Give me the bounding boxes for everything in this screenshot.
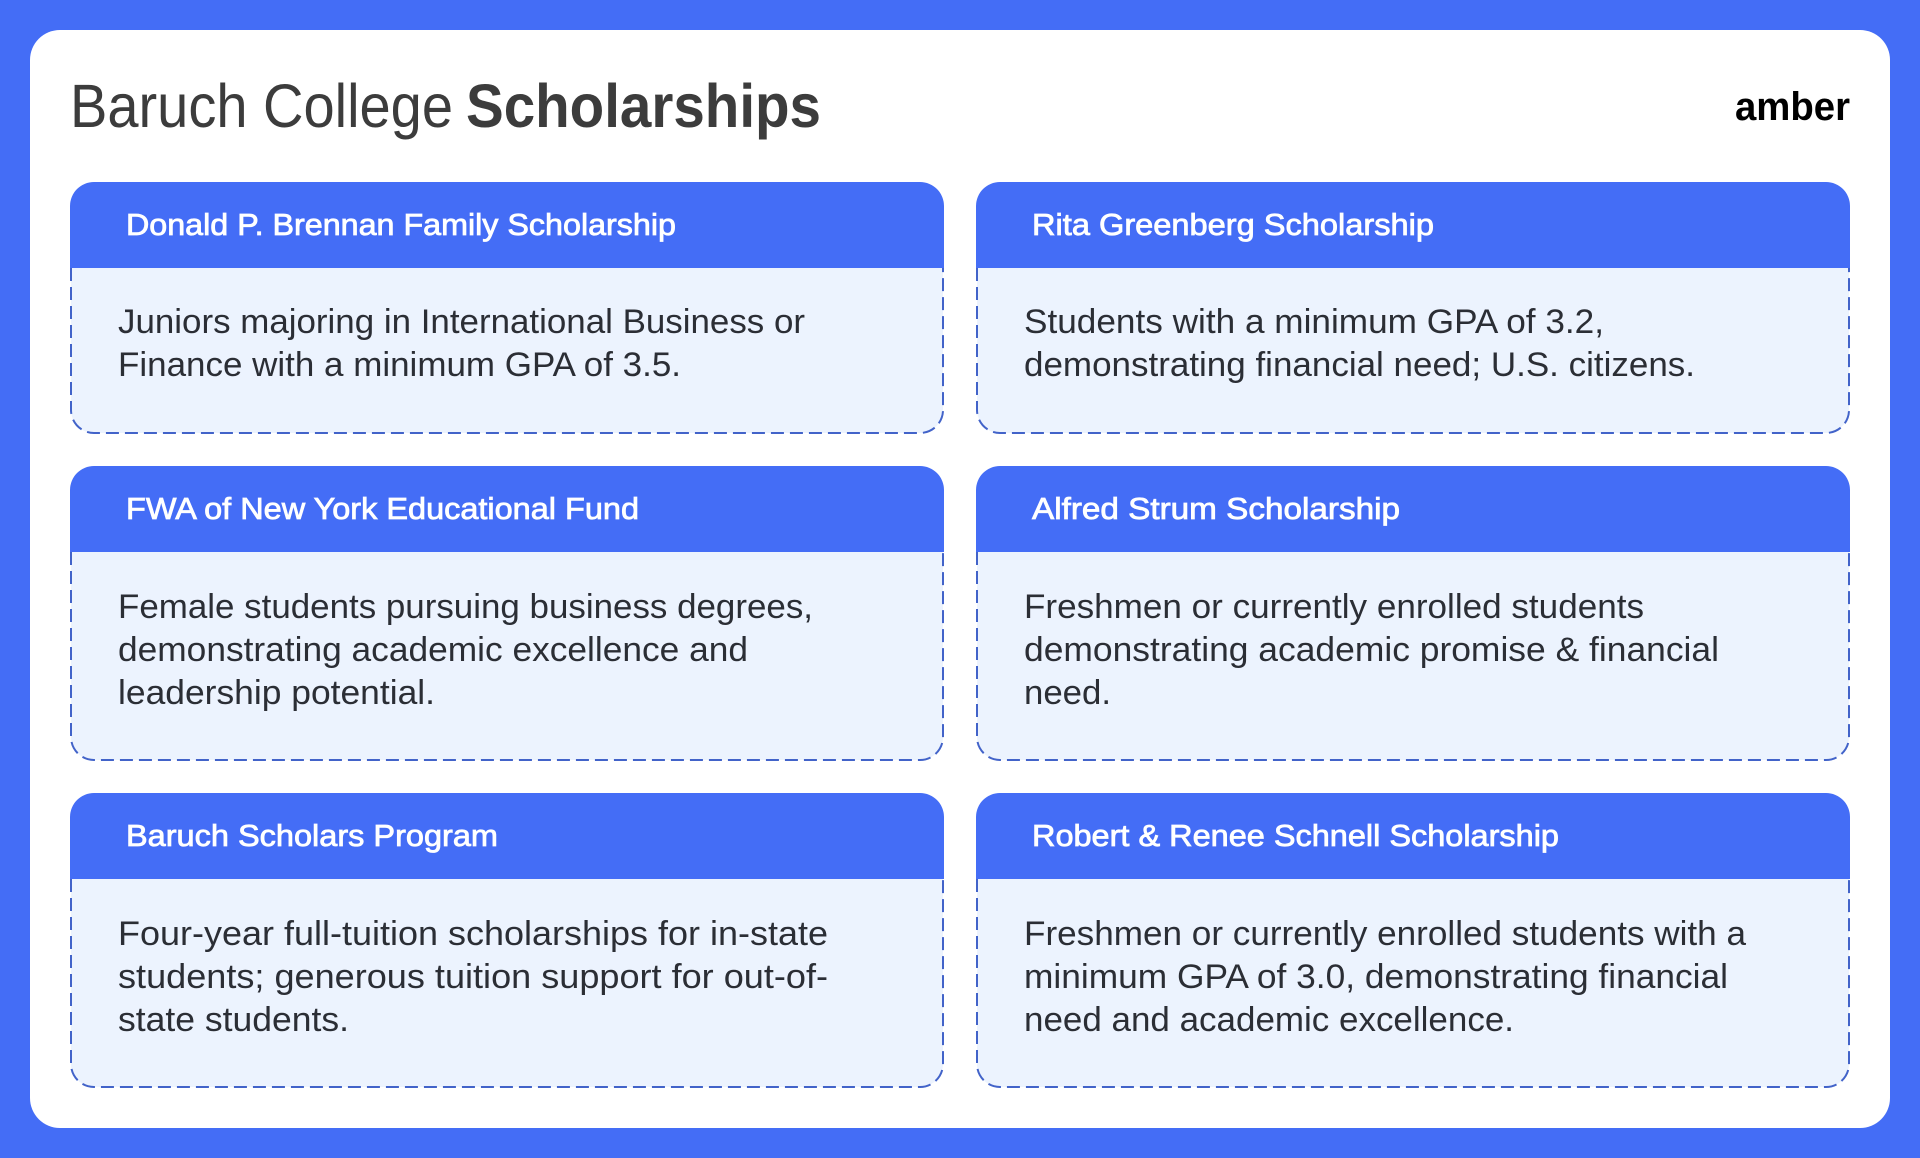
card text: leadership potential. <box>118 674 435 712</box>
card text <box>118 303 805 384</box>
card heading: Robert & Renee Schnell Scholarship <box>1032 818 1559 853</box>
card heading: Donald P. Brennan Family Scholarship <box>126 207 676 242</box>
card text: Female students pursuing business degrees, <box>118 588 813 626</box>
title: Baruch College <box>70 72 453 140</box>
card text: demonstrating academic excellence and <box>118 631 748 669</box>
card: FWA of New York Educational Fund <box>70 466 944 760</box>
card: Robert & Renee Schnell Scholarship <box>976 793 1850 1087</box>
card text: need and academic excellence. <box>1024 1001 1514 1039</box>
title: Scholarships <box>466 72 821 140</box>
card: Rita Greenberg Scholarship <box>976 182 1850 433</box>
card text: Four-year full-tuition scholarships for in-state <box>118 915 828 953</box>
card heading: Baruch Scholars Program <box>126 818 498 853</box>
card text <box>118 588 813 712</box>
card: Donald P. Brennan Family Scholarship <box>70 182 944 433</box>
card: Baruch Scholars Program <box>70 793 944 1087</box>
card heading: FWA of New York Educational Fund <box>126 491 639 526</box>
logo: amber: amber <box>1735 85 1850 129</box>
card text: Freshmen or currently enrolled students <box>1024 588 1644 626</box>
card text: Finance with a minimum GPA of 3.5. <box>118 346 681 384</box>
card text: need. <box>1024 674 1111 712</box>
card text: students; generous tuition support for out-of- <box>118 958 828 996</box>
card text <box>1024 588 1719 712</box>
card heading: Rita Greenberg Scholarship <box>1032 207 1434 242</box>
card text: Juniors majoring in International Business or <box>118 303 805 341</box>
card text: demonstrating academic promise & financial <box>1024 631 1719 669</box>
card text <box>1024 303 1695 384</box>
card text: Students with a minimum GPA of 3.2, <box>1024 303 1604 341</box>
card text <box>1024 915 1747 1039</box>
card text: minimum GPA of 3.0, demonstrating financial <box>1024 958 1728 996</box>
card heading: Alfred Strum Scholarship <box>1032 491 1400 526</box>
card: Alfred Strum Scholarship <box>976 466 1850 760</box>
card text: Freshmen or currently enrolled students with a <box>1024 915 1747 953</box>
card text: demonstrating financial need; U.S. citizens. <box>1024 346 1695 384</box>
title <box>70 72 821 140</box>
card text <box>118 915 828 1039</box>
card text: state students. <box>118 1001 349 1039</box>
